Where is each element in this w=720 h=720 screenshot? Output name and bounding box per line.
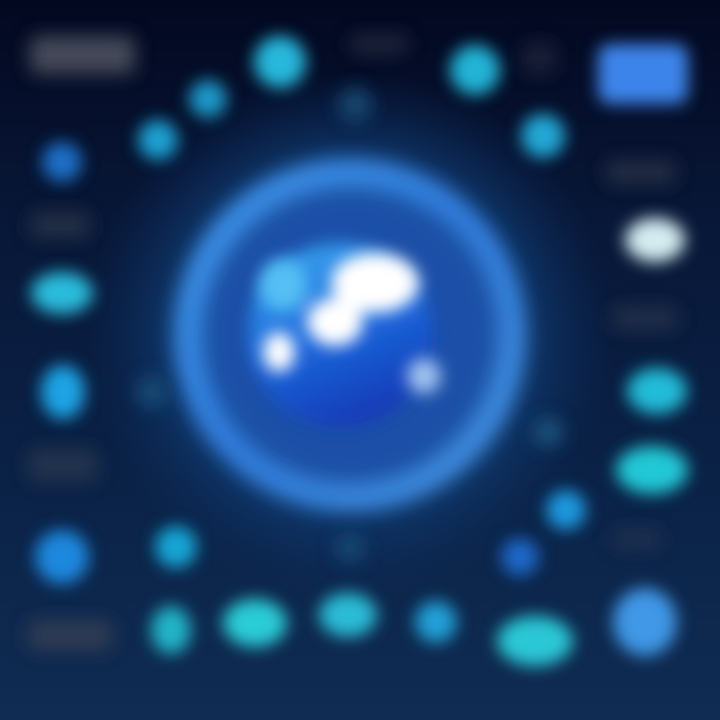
globe sphere [248,243,432,427]
icon: right lower dot 2 [501,538,539,576]
label left upper [30,212,90,238]
outer ring [187,172,513,498]
icon: bottom dot 3 [415,601,457,643]
icon: bottom dot 2 [151,606,191,654]
label top right [522,42,556,74]
icon: top dot 1 [254,36,306,88]
icon: bottom oval 3 [497,616,573,666]
icon: top right dot [521,114,565,158]
icon: top dot 3 [138,120,178,160]
icon: right teal oval 1 [627,368,687,414]
label top centre [350,34,408,54]
dim dots [136,88,562,562]
label right lower [612,528,662,550]
globe continents [259,253,441,394]
icon: left teal oval [31,272,93,314]
label right middle [612,306,678,330]
label bottom left [28,620,112,650]
icon: right lower dot 1 [546,490,586,530]
icon: bottom oval 1 [223,599,287,647]
icon: bottom dot 1 [155,526,197,568]
icon: left dot 2 [41,365,85,419]
icon: top dot 2 [189,80,227,118]
label top left [30,36,135,74]
icon: top dot 4 [450,45,500,95]
globe emblem [187,172,513,498]
icon: left dot 1 [42,142,82,182]
icon: right white oval [625,218,685,262]
icon: bottom right blob [613,588,677,656]
dim dot right [534,418,562,446]
central glow [85,70,615,600]
dim dot top [338,88,372,122]
label left lower [28,448,98,482]
icon: right teal oval 2 [616,446,688,494]
grey label blocks [28,34,678,650]
icon: left dot 3 [35,530,89,584]
dim dot bottom [336,534,364,562]
dim dot left [136,376,168,408]
icon: top right blue panel [598,44,688,104]
label right upper [606,160,676,184]
icon: bottom oval 2 [319,593,377,637]
icon ring [31,36,688,666]
